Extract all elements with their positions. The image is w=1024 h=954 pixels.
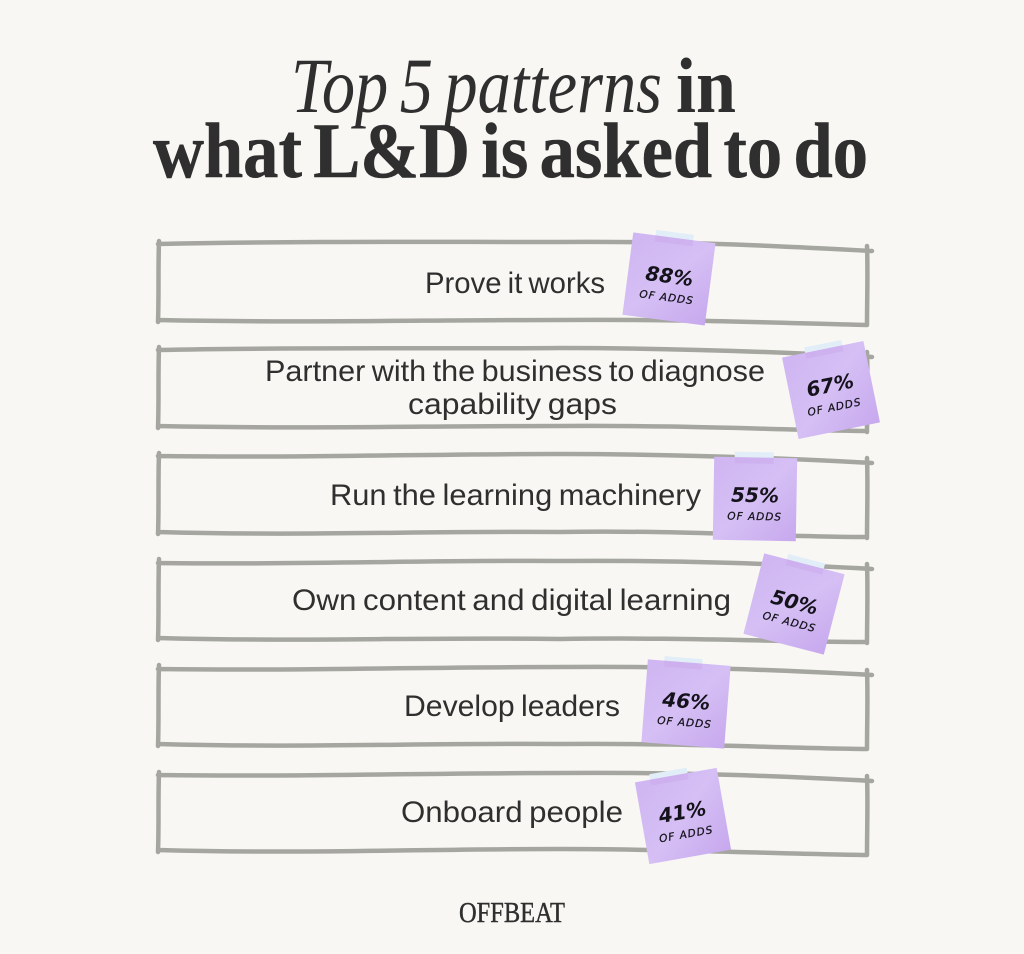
logo: OFFBEAT: OFFBEAT — [459, 898, 565, 929]
row 3 label: Run the learning machinery — [330, 479, 701, 512]
row 2 label: capability gaps — [408, 388, 617, 421]
row 5 label: Develop leaders — [404, 690, 620, 723]
sticky note: 50%: 50% — [768, 584, 821, 620]
row 6 label: Onboard people — [401, 796, 623, 829]
sticky note: 41% — [634, 763, 731, 864]
row 4 label: Own content and digital learning — [292, 584, 731, 617]
sticky note: 67%: 67% — [804, 369, 856, 402]
sticky note: 46% — [641, 655, 731, 749]
row 2 box: Partner with the business — [158, 347, 872, 432]
row 4 box: Own content and digital learning — [158, 559, 872, 643]
sticky note: 46%: 46% — [660, 687, 711, 715]
sticky note: 50%: OF ADDS — [761, 610, 817, 635]
sticky note: 88%: OF ADDS — [639, 288, 694, 307]
sticky note: 41%: 41% — [656, 796, 708, 828]
row 3 box: Run the learning machinery — [158, 453, 872, 538]
sticky note: 55% — [713, 451, 797, 541]
row 5 box: Develop leaders — [158, 665, 872, 749]
sticky note: 41%: OF ADDS — [658, 824, 714, 845]
sticky note: 67%: OF ADDS — [807, 396, 863, 419]
title: Top 5 patterns — [291, 42, 662, 129]
sticky note: 67% — [781, 336, 880, 439]
row 1 box: Prove it works — [158, 241, 872, 325]
row 6 box: Onboard people — [158, 772, 872, 855]
row 2 label: Partner with the business to diagnose — [265, 355, 765, 388]
row 1 label: Prove it works — [425, 267, 605, 300]
sticky note: 55%: 55% — [731, 483, 779, 507]
sticky note: 46%: OF ADDS — [657, 715, 712, 731]
title: what L&D is asked to do — [153, 107, 868, 194]
row 2 label — [265, 355, 765, 421]
sticky note: 88%: 88% — [644, 261, 695, 291]
title: in — [676, 42, 736, 129]
sticky note: 88% — [622, 227, 716, 326]
title — [153, 42, 868, 194]
sticky note: 55%: OF ADDS — [727, 511, 782, 523]
sticky note: 50% — [743, 548, 846, 655]
